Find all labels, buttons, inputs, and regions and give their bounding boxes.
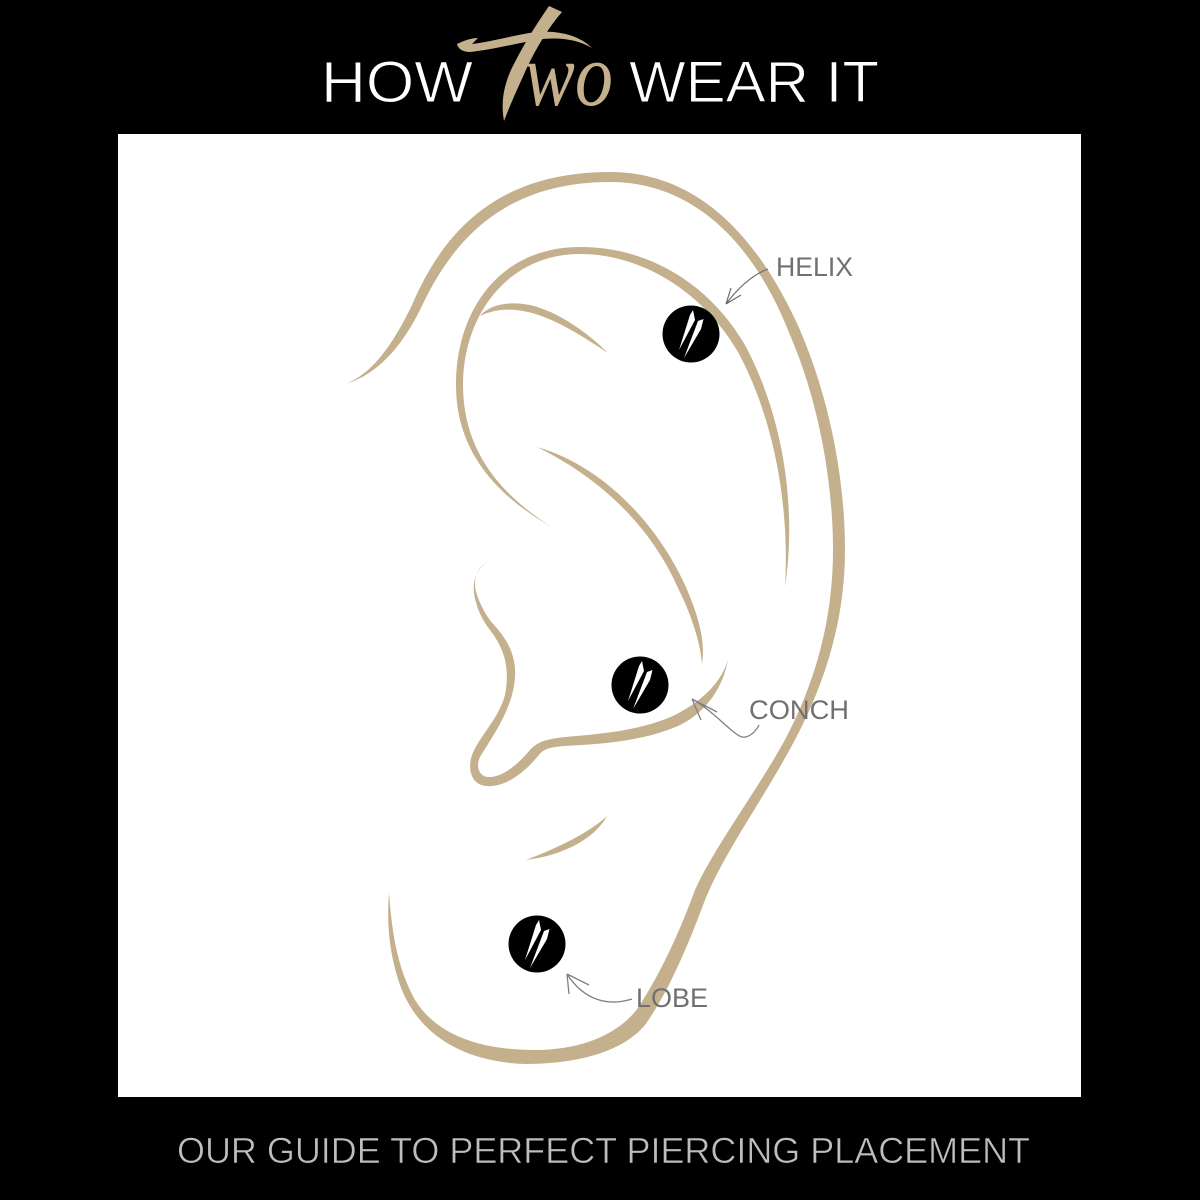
title: wear it: WEAR IT — [629, 50, 879, 115]
arrow: helix — [726, 269, 768, 304]
arrow: lobe — [567, 974, 632, 1002]
title: how: HOW — [321, 50, 473, 115]
ear: upper branch — [480, 303, 608, 353]
piercing: conch stud — [612, 656, 668, 714]
ear: antihelix — [537, 447, 703, 664]
label: conch: CONCH — [749, 695, 849, 725]
ear: outer helix and lobe — [346, 172, 845, 1064]
label: helix: HELIX — [776, 252, 853, 282]
ear: tragus and concha — [470, 558, 728, 786]
title: script two — [457, 6, 613, 125]
label: lobe: LOBE — [636, 983, 708, 1013]
title — [321, 6, 879, 125]
piercing: helix stud — [662, 306, 720, 362]
ear: inner helix — [456, 247, 789, 587]
ear illustration — [346, 172, 845, 1064]
subtitle: OUR GUIDE TO PERFECT PIERCING PLACEMENT — [177, 1130, 1030, 1171]
ear: lower crease — [526, 816, 607, 860]
title: script two: wo — [524, 26, 613, 125]
panel: white ear area — [118, 134, 1081, 1097]
piercing: lobe stud — [508, 916, 566, 972]
arrow: conch — [692, 699, 759, 737]
